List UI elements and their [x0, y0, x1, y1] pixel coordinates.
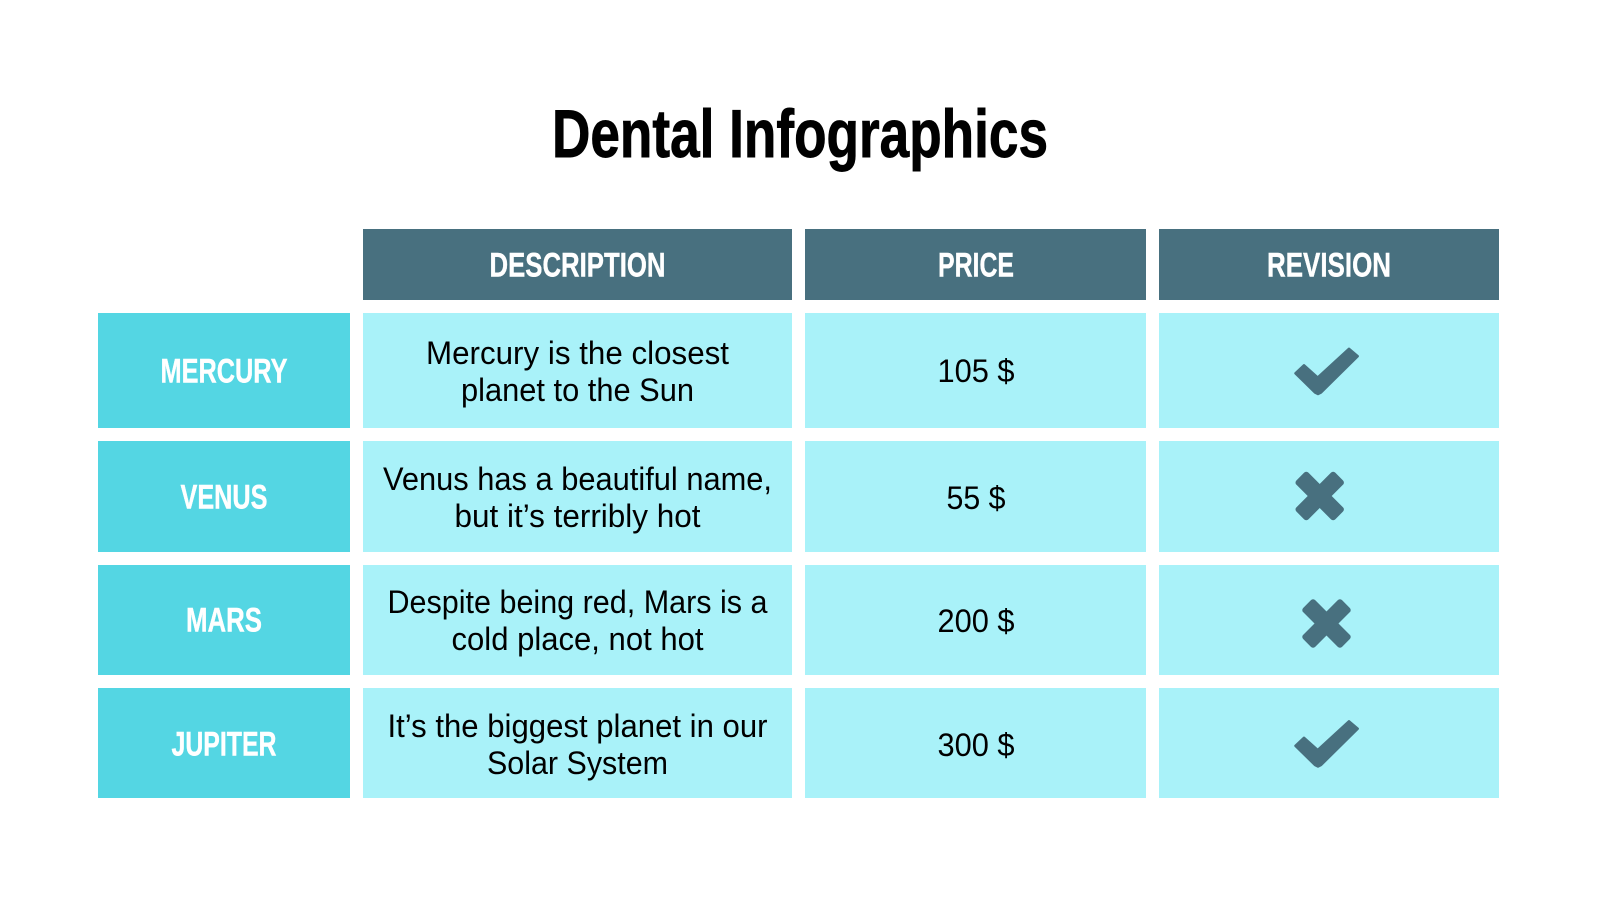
row label: Jupiter [98, 688, 350, 798]
row label: Jupiter: JUPITER [172, 726, 276, 764]
row: Mars [98, 565, 1499, 675]
row label: Venus [98, 441, 350, 552]
header: description: DESCRIPTION [490, 246, 666, 284]
description: Jupiter [363, 688, 792, 798]
revision: Mercury [1159, 313, 1499, 428]
price: Mars: 200 $ [938, 603, 1015, 639]
description: Mercury: Mercury is the closest [426, 335, 729, 371]
row: Mercury [98, 313, 1499, 428]
header: revision: REVISION [1267, 246, 1391, 284]
description: Mars: Despite being red, Mars is a [388, 584, 768, 620]
description: Jupiter: It’s the biggest planet in our [388, 708, 768, 744]
revision: Mars [1159, 565, 1499, 675]
description: Jupiter: Solar System [487, 745, 668, 781]
row label: Mercury: MERCURY [160, 352, 288, 390]
price: Mercury [805, 313, 1146, 428]
description: Mars [363, 565, 792, 675]
description: Mercury: planet to the Sun [461, 372, 694, 408]
revision: Jupiter [1159, 688, 1499, 798]
row label: Mars [98, 565, 350, 675]
header: revision [1159, 229, 1499, 300]
title: Dental Infographics [552, 96, 1048, 172]
header: price: PRICE [938, 246, 1014, 284]
description: Venus: but it’s terribly hot [454, 498, 701, 534]
row label: Mercury [98, 313, 350, 428]
description: Venus [363, 441, 792, 552]
price: Jupiter: 300 $ [938, 727, 1015, 763]
price: Mars [805, 565, 1146, 675]
price: Mercury: 105 $ [938, 353, 1015, 389]
price: Jupiter [805, 688, 1146, 798]
row label: Mars: MARS [186, 602, 262, 640]
price: Venus [805, 441, 1146, 552]
description: Mars: cold place, not hot [452, 621, 704, 657]
icon: check mark [1296, 349, 1358, 394]
icon: cross [1294, 471, 1345, 521]
revision: Venus [1159, 441, 1499, 552]
row: Venus [98, 441, 1499, 552]
header: price [805, 229, 1146, 300]
description: Venus: Venus has a beautiful name, [383, 461, 772, 497]
icon: check mark [1296, 721, 1358, 766]
row label: Venus: VENUS [180, 478, 268, 516]
header: description [363, 229, 792, 300]
row: Jupiter [98, 688, 1499, 798]
icon: cross [1301, 598, 1352, 649]
table [98, 229, 1499, 798]
description: Mercury [363, 313, 792, 428]
price: Venus: 55 $ [946, 480, 1006, 516]
